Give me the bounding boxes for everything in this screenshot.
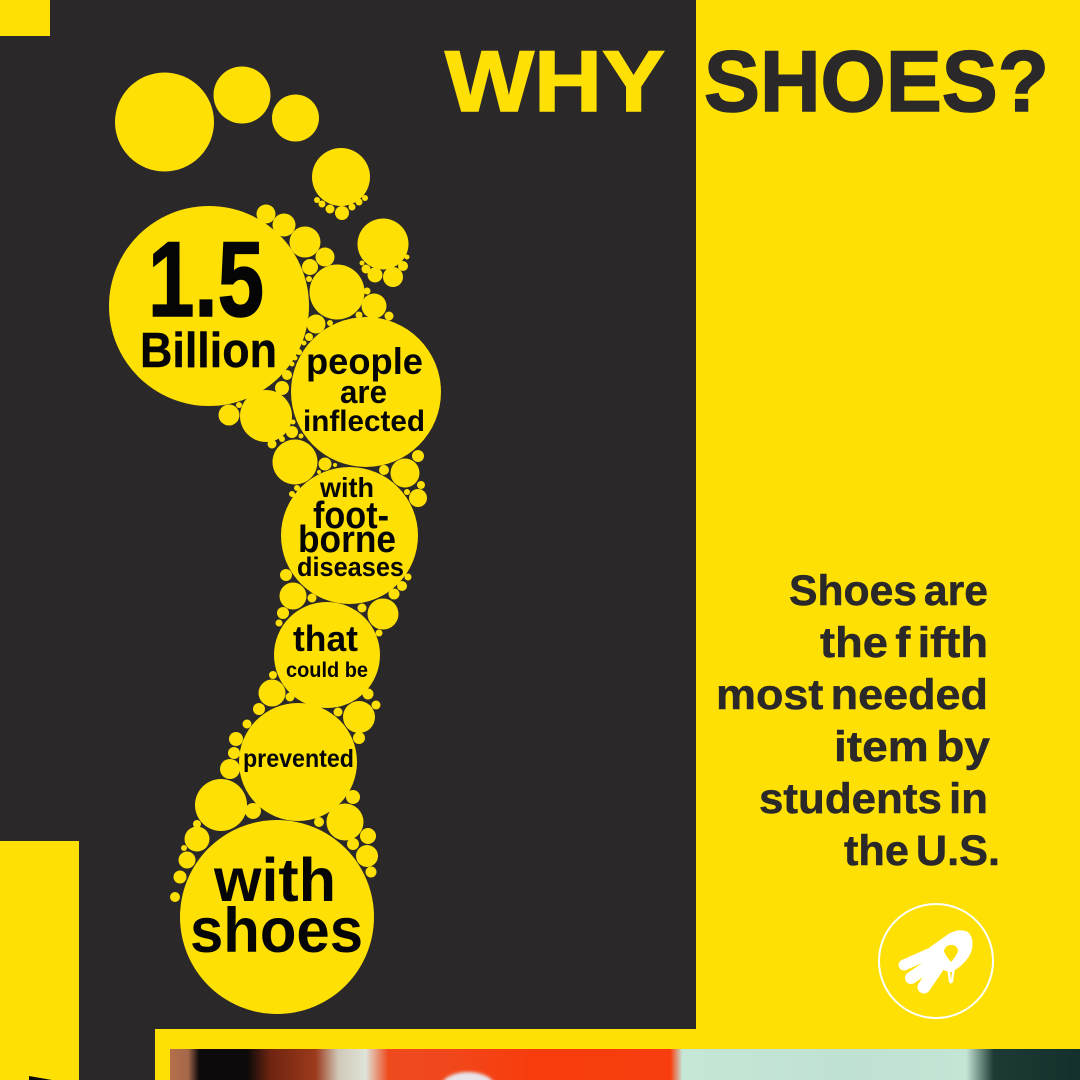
circle: with foot-borne diseases: foot- bbox=[313, 495, 389, 537]
circle: with shoes: with bbox=[213, 846, 336, 914]
circle: people are inflected bbox=[291, 317, 441, 467]
side statement text: the U.S. bbox=[844, 827, 1000, 875]
side statement text: the f ifth bbox=[820, 619, 988, 667]
circle: people are inflected: are bbox=[340, 374, 387, 410]
circle: with shoes: shoes bbox=[190, 896, 363, 966]
circle: people are inflected: people bbox=[306, 341, 423, 382]
yellow block bottom-left bbox=[0, 841, 79, 1080]
side statement text: Shoes are bbox=[789, 567, 988, 615]
footprint made of circles bbox=[109, 66, 441, 1014]
dark strip left of photo bbox=[79, 1029, 155, 1080]
circle: people are inflected: inflected bbox=[303, 405, 425, 438]
small filler circles bbox=[170, 204, 427, 902]
side statement text bbox=[716, 567, 1000, 875]
circle: 1.5 billion: Billion bbox=[140, 324, 277, 378]
circle: with shoes bbox=[180, 820, 374, 1014]
side statement text: item by bbox=[834, 723, 990, 771]
title: why shoes bbox=[445, 34, 1049, 130]
circle: with foot-borne diseases: with bbox=[319, 472, 374, 503]
title word: why: WHY bbox=[445, 34, 665, 130]
circle: prevented: prevented bbox=[243, 745, 354, 773]
dark panel bbox=[0, 0, 696, 1029]
circle: with foot-borne diseases bbox=[281, 467, 418, 604]
circle: that could be: could be bbox=[286, 659, 368, 682]
icon: hand logo bbox=[879, 904, 993, 1018]
circle: prevented bbox=[239, 703, 357, 821]
side statement text: most needed bbox=[716, 671, 988, 719]
circle: with foot-borne diseases: borne bbox=[298, 519, 396, 561]
title word: shoes: SHOES? bbox=[704, 34, 1049, 130]
toes bbox=[115, 66, 410, 287]
black corner mark bbox=[29, 1076, 52, 1080]
yellow corner block top-left bbox=[0, 0, 50, 36]
circle: with foot-borne diseases: diseases bbox=[297, 552, 404, 582]
circle: that could be bbox=[274, 602, 380, 708]
circle: 1.5 billion bbox=[109, 206, 309, 406]
photo strip bbox=[170, 1049, 1080, 1080]
circle: that could be: that bbox=[293, 618, 358, 659]
circle: 1.5 billion: 1.5 bbox=[148, 219, 264, 339]
side statement text: students in bbox=[759, 775, 988, 823]
